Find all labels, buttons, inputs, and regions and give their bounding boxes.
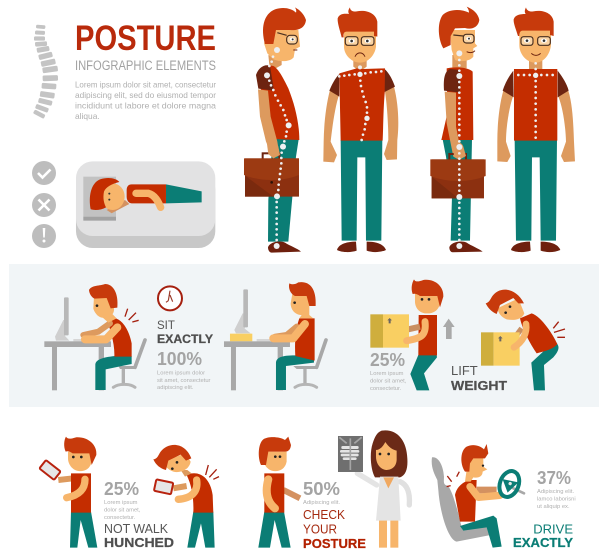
icon: exclamation bbox=[32, 224, 56, 248]
walk text 25%: dolor sit amet, bbox=[104, 508, 141, 514]
icon: check bbox=[32, 161, 56, 185]
spine dots side view bbox=[264, 47, 292, 249]
panel: sit and lift band bbox=[9, 264, 599, 407]
lift weight heading: WEIGHT bbox=[451, 378, 507, 393]
walk text 25%: Lorem ipsum bbox=[104, 500, 138, 506]
title: POSTURE bbox=[75, 19, 216, 58]
not walk hunched heading: HUNCHED bbox=[104, 535, 174, 550]
drive exactly heading: EXACTLY bbox=[513, 535, 573, 550]
icon: up arrow bbox=[443, 319, 455, 339]
drive text 37%: 37% bbox=[537, 467, 571, 488]
icon: clock bbox=[158, 286, 182, 310]
sit exactly text block bbox=[157, 320, 213, 391]
illustration: doctor with x-ray bbox=[338, 430, 409, 548]
not walk hunched heading: NOT WALK bbox=[104, 521, 168, 536]
sit exactly text block: 100% bbox=[157, 348, 202, 369]
walk text 25%: consectetur. bbox=[104, 515, 136, 521]
check your posture text: CHECK bbox=[303, 507, 345, 522]
illustration: hunched man with phone bbox=[153, 445, 219, 548]
subtitle: INFOGRAPHIC ELEMENTS bbox=[75, 58, 216, 73]
icon: spine bbox=[33, 25, 58, 119]
drive text 37%: Adipiscing elit. bbox=[537, 489, 574, 495]
lift text 25%: dolor sit amet, bbox=[370, 378, 407, 384]
illustration: bent lifting man with box bbox=[481, 290, 565, 390]
check your posture text: YOUR bbox=[303, 522, 337, 536]
illustration: hunched man at desk bbox=[44, 284, 145, 390]
icon: cross bbox=[32, 193, 56, 217]
spine dots straight front view bbox=[517, 62, 554, 139]
intro text block bbox=[75, 80, 216, 121]
illustration: correct lifting man with box bbox=[370, 279, 443, 390]
check your posture text: POSTURE bbox=[303, 536, 366, 551]
illustration: correct sitting man at desk bbox=[224, 282, 326, 390]
spine dots front view bbox=[338, 65, 383, 141]
drive exactly heading bbox=[513, 522, 573, 550]
figure: correct side view with briefcase bbox=[430, 7, 486, 252]
drive text 37% bbox=[537, 467, 576, 510]
walk text 25%: 25% bbox=[104, 478, 139, 499]
spine dots straight side view bbox=[456, 50, 462, 249]
not walk hunched heading bbox=[104, 521, 174, 550]
figure: correct front view bbox=[497, 7, 575, 252]
check your posture text: Adipiscing elit. bbox=[303, 500, 340, 506]
drive text 37%: ut aliquip ex. bbox=[537, 504, 570, 510]
check your posture text bbox=[303, 478, 366, 551]
lift text 25%: consectetur. bbox=[370, 386, 402, 392]
lift text 25%: 25% bbox=[370, 349, 405, 370]
walk text 25% bbox=[104, 478, 141, 521]
lift text 25%: Lorem ipsum bbox=[370, 371, 404, 377]
sit exactly text block: EXACTLY bbox=[157, 334, 213, 346]
illustration: driver in car seat bbox=[432, 444, 524, 548]
lift text 25% bbox=[370, 349, 407, 392]
sit exactly text block: sit amet, consectetur bbox=[157, 378, 211, 384]
check your posture text: 50% bbox=[303, 478, 340, 499]
intro text block: aliqua. bbox=[75, 111, 100, 121]
figure: hunched side view with briefcase bbox=[244, 7, 306, 253]
sit exactly text block: SIT bbox=[157, 320, 175, 332]
lift weight heading bbox=[451, 363, 507, 393]
lift weight heading: LIFT bbox=[451, 363, 478, 378]
mattress with sleeping man bbox=[76, 161, 215, 248]
drive exactly heading: DRIVE bbox=[533, 522, 573, 536]
sit exactly text block: Lorem ipsum dolor bbox=[157, 370, 205, 376]
intro text block: incididunt ut labore et dolore magna bbox=[75, 100, 216, 110]
illustration: man with phone upright bbox=[39, 437, 97, 548]
drive text 37%: lamco laborisni bbox=[537, 496, 576, 502]
sit exactly text block: adipiscing elit. bbox=[157, 385, 194, 391]
illustration: man seen from side at doctor bbox=[258, 437, 300, 548]
intro text block: Lorem ipsum dolor sit amet, consectetur bbox=[75, 80, 216, 90]
figure: hunched front view bbox=[323, 7, 398, 252]
intro text block: adipiscing elit, sed do eiusmod tempor bbox=[75, 90, 216, 100]
